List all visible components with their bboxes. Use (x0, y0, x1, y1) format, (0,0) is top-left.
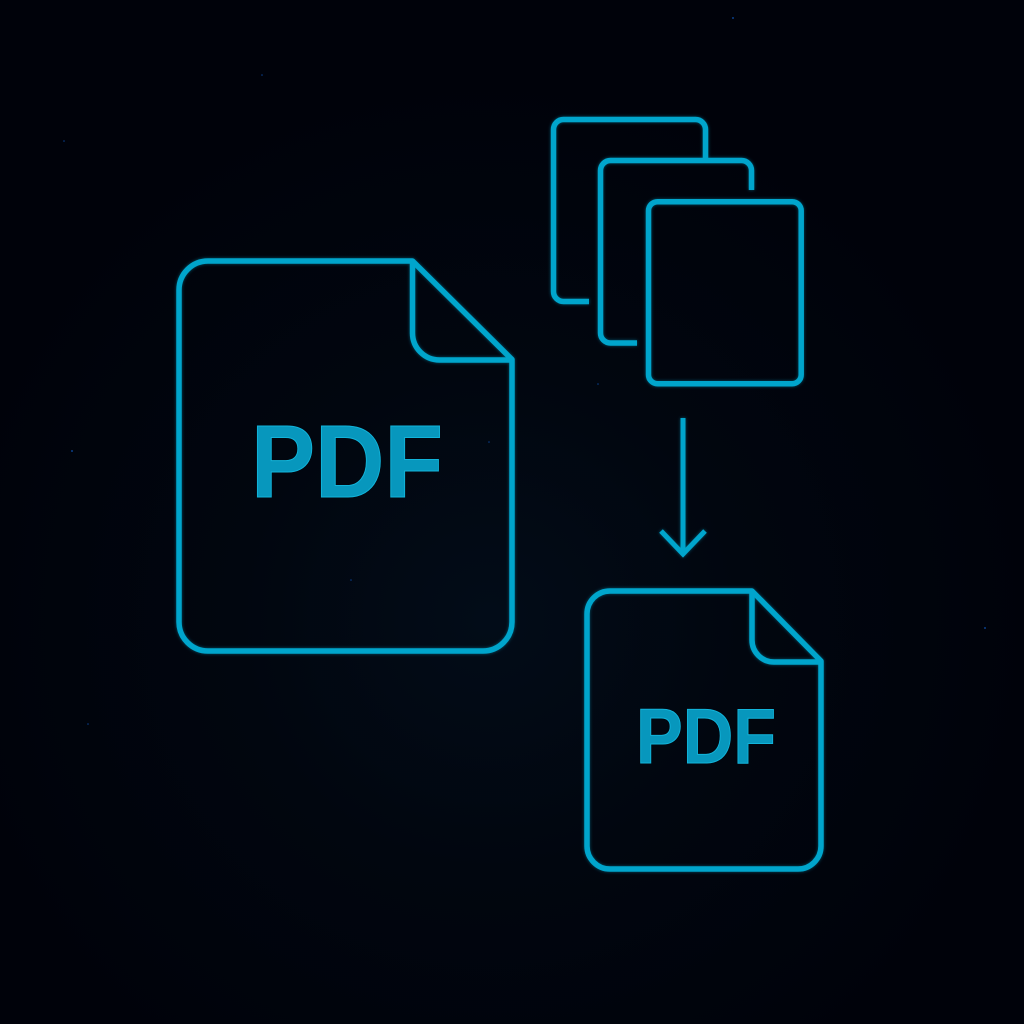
large PDF document icon (179, 261, 512, 651)
small PDF document icon (587, 591, 821, 869)
middle page (600, 160, 752, 343)
front page (648, 202, 801, 384)
small PDF label: PDF (636, 692, 776, 780)
arrow down (661, 418, 705, 554)
back page (554, 120, 706, 302)
large PDF label: PDF (251, 404, 443, 519)
stacked pages icon (554, 120, 801, 384)
